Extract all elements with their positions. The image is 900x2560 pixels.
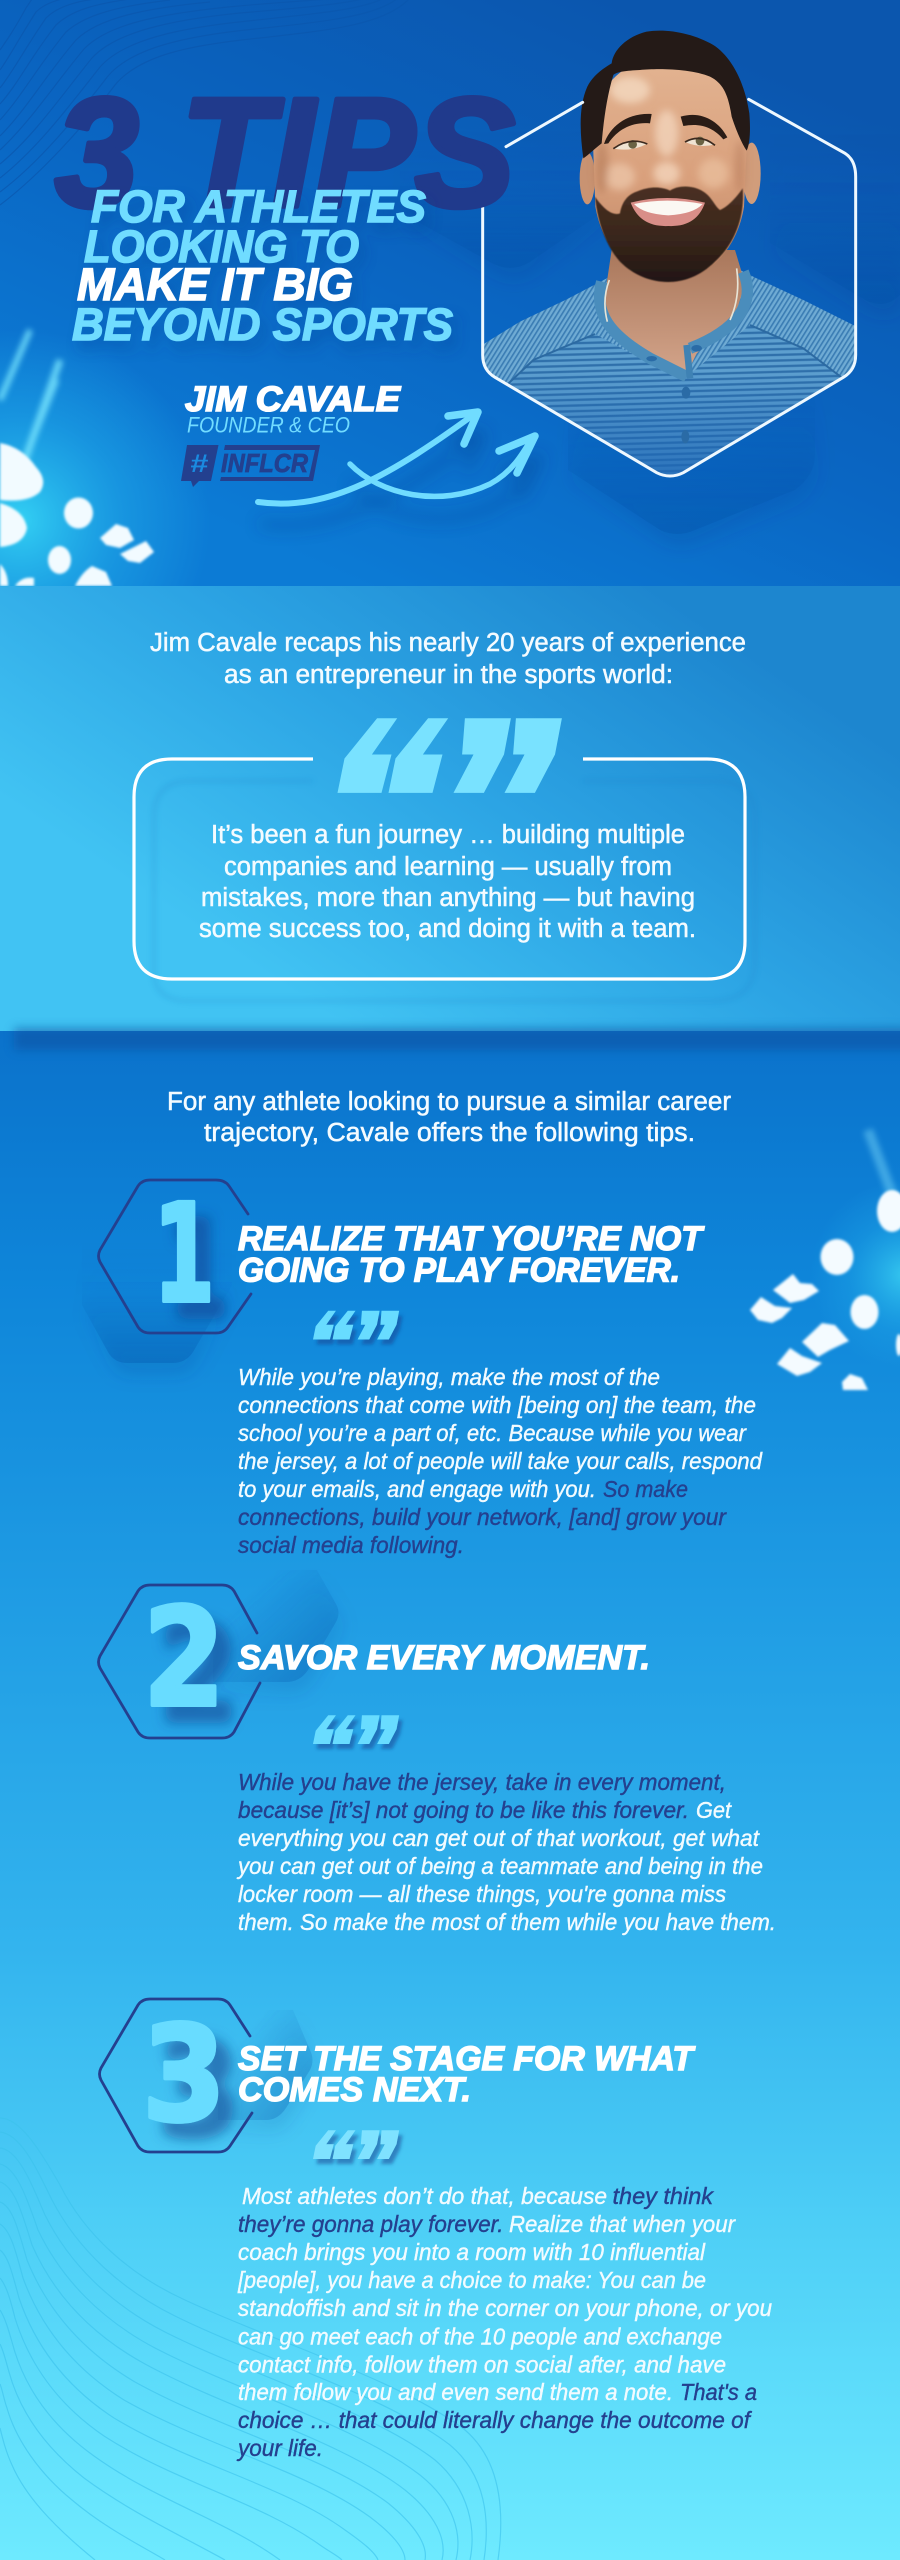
tip 2 (98, 1570, 776, 1935)
body text, tip 2: them. So make the most of them while you have them. (238, 1909, 776, 1935)
icon: quote marks, tip 2 (313, 1715, 399, 1744)
face highlights (595, 77, 745, 193)
neck and chest (605, 250, 745, 374)
shirt (484, 270, 854, 474)
body text, tip 1: school you’re a part of, etc. Because while you wear (238, 1420, 747, 1446)
body text, tip 1: connections that come with [being on] the team, the (238, 1392, 756, 1418)
body text, tip 3: contact info, follow them on social after, and have (238, 2352, 726, 2378)
panel: tips section (0, 1028, 900, 2560)
intro text (150, 629, 746, 689)
face (593, 56, 747, 282)
subtitle: MAKE IT BIG (77, 259, 353, 310)
tips intro text: For any athlete looking to pursue a similar career (167, 1088, 732, 1116)
panel: header (0, 0, 900, 586)
body text, tip 1: to your emails, and engage with you. (238, 1476, 596, 1502)
shaded hexagon, tip 3 (218, 2010, 312, 2120)
body text, tip 1: connections, build your network, [and] grow your (238, 1504, 727, 1530)
background hexagon shapes behind portrait (400, 120, 900, 534)
heading, tip 1: REALIZE THAT YOU’RE NOT (238, 1220, 705, 1258)
body text, tip 3: they’re gonna play forever. (238, 2211, 504, 2237)
body text, tip 3: them follow you and even send them a note. (238, 2379, 673, 2405)
body text, tip 3: your life. (236, 2435, 323, 2461)
intro text: Jim Cavale recaps his nearly 20 years of experience (150, 629, 746, 657)
heading, tip 3 (238, 2040, 696, 2109)
name and role: JIM CAVALE (185, 380, 402, 419)
shaded hexagon, tip 2 (213, 1570, 338, 1682)
number 1: 1 (153, 1176, 215, 1334)
tips intro text: trajectory, Cavale offers the following tips. (204, 1119, 695, 1147)
subtitle: FOR ATHLETES (91, 181, 426, 232)
necklace (605, 268, 738, 322)
body text, tip 3: standoffish and sit in the corner on your phone, or you (238, 2295, 772, 2321)
subtitle (72, 181, 453, 350)
eyebrows (604, 114, 727, 144)
quote text (199, 821, 696, 943)
icon: large quote marks (338, 718, 562, 793)
panel: intro quote section (0, 586, 900, 1032)
bokeh stadium lights, bottom left (0, 330, 230, 586)
quote text: It’s been a fun journey … building multiple (211, 821, 685, 849)
buttons (646, 345, 702, 443)
quote box (134, 759, 755, 1001)
body text, tip 2: Get (696, 1797, 733, 1823)
beard (595, 187, 743, 282)
hexagon outline (483, 99, 856, 476)
body text, tip 3: they think (612, 2183, 715, 2209)
body text, tip 2: everything you can get out of that workout, get what (238, 1825, 761, 1851)
body text, tip 3: That's a (680, 2379, 757, 2405)
subtitle: LOOKING TO (84, 221, 359, 272)
icon: quote marks, tip 1 (313, 1311, 399, 1339)
logo: INFLCR (181, 445, 320, 487)
heading, tip 1: GOING TO PLAY FOREVER. (238, 1252, 680, 1290)
icon: quote marks, tip 3 (313, 2130, 399, 2159)
body text, tip 1: the jersey, a lot of people will take your calls, respond (238, 1448, 763, 1474)
logo: INFLCR: INFLCR (221, 448, 308, 478)
bokeh stadium lights, right (750, 1130, 900, 1400)
body text, tip 1: While you’re playing, make the most of the (238, 1364, 660, 1390)
tips intro text (167, 1088, 732, 1147)
body text, tip 2 (236, 1769, 776, 1935)
body text, tip 1 (238, 1364, 763, 1558)
ears (580, 152, 595, 204)
body text, tip 3 (236, 2183, 772, 2461)
collar (600, 282, 687, 377)
quote text: companies and learning — usually from (224, 853, 672, 881)
mouth (631, 198, 705, 226)
body text, tip 2: While you have the jersey, take in every moment, (238, 1769, 726, 1795)
name and role (185, 380, 402, 438)
subtitle: BEYOND SPORTS (72, 299, 453, 350)
logo: INFLCR: # (190, 450, 208, 478)
body text, tip 3: [people], you have a choice to make: You can be (237, 2267, 706, 2293)
hexagon outline, tip 2 (98, 1585, 260, 1738)
arrows (258, 412, 535, 504)
number 3: 3 (142, 1998, 226, 2152)
title: 3 TIPS: 3 TIPS (55, 66, 515, 239)
hexagon outline, tip 1 (98, 1180, 251, 1333)
contour lines, bottom left (0, 2118, 501, 2560)
quote text: some success too, and doing it with a team. (199, 915, 696, 943)
body text, tip 3: choice … that could literally change the outcome of (238, 2407, 753, 2433)
body text, tip 1: So make (603, 1476, 688, 1502)
contour lines, top left (0, 0, 410, 205)
body text, tip 3: Most athletes don’t do that, because (242, 2183, 607, 2209)
heading, tip 1 (238, 1220, 705, 1290)
tip 1 (82, 1176, 763, 1558)
shaded hexagon, tip 1 (82, 1240, 232, 1363)
body text, tip 1: social media following. (238, 1532, 464, 1558)
body text, tip 2: you can get out of being a teammate and being in the (236, 1853, 763, 1879)
heading, tip 3: SET THE STAGE FOR WHAT (238, 2040, 696, 2078)
body text, tip 2: locker room — all these things, you're gonna miss (238, 1881, 726, 1907)
body text, tip 3: can go meet each of the 10 people and exchange (238, 2324, 722, 2350)
body text, tip 3: Realize that when your (509, 2211, 736, 2237)
quote text: mistakes, more than anything — but having (201, 884, 695, 912)
intro text: as an entrepreneur in the sports world: (224, 661, 673, 689)
tip 3 (100, 1998, 772, 2461)
portrait photo in hexagon frame (477, 31, 860, 487)
hexagon outline, tip 3 (100, 1999, 252, 2152)
body text, tip 2: because [it’s] not going to be like this forever. (238, 1797, 689, 1823)
body text, tip 3: coach brings you into a room with 10 influential (238, 2239, 706, 2265)
eyes (613, 137, 715, 150)
number 2: 2 (143, 1580, 225, 1738)
name and role: FOUNDER & CEO (187, 412, 350, 438)
hair (581, 31, 750, 158)
heading, tip 2: SAVOR EVERY MOMENT. (238, 1639, 650, 1677)
heading, tip 3: COMES NEXT. (238, 2071, 471, 2109)
